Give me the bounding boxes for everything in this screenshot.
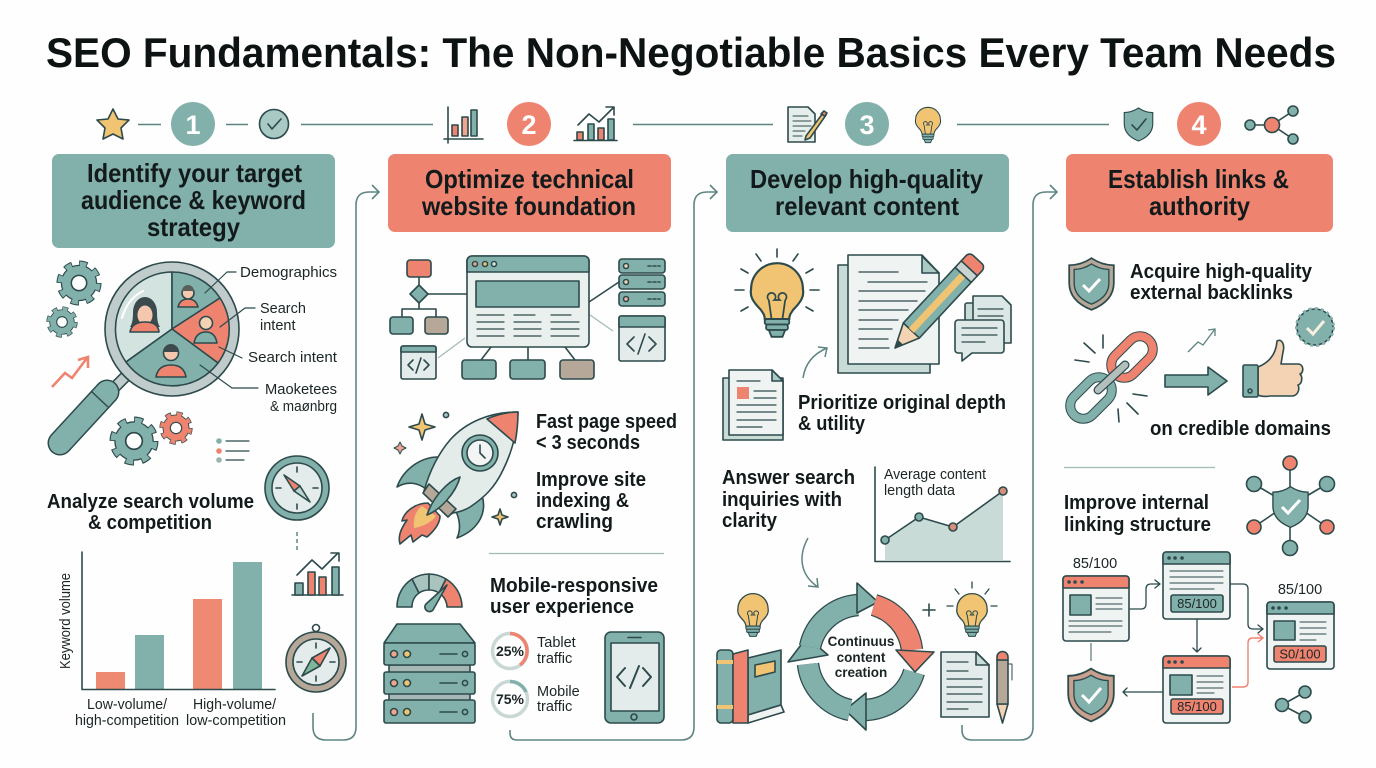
code window large bbox=[619, 316, 665, 361]
diagram: site architecture bbox=[390, 256, 665, 379]
icon: chain link bbox=[1065, 331, 1158, 424]
donut: tablet traffic 25%: traffic bbox=[537, 651, 572, 667]
person: man bottom bbox=[156, 344, 186, 377]
icon: server rack bbox=[384, 624, 475, 723]
icon: bar chart bbox=[444, 107, 483, 143]
plus sign bbox=[923, 604, 935, 616]
text: answer search inquiries bbox=[722, 467, 855, 532]
line chart: average content length bbox=[875, 467, 1010, 562]
icon: chat documents bbox=[955, 296, 1011, 361]
text: acquire backlinks bbox=[1130, 261, 1313, 304]
text: fast page speed: Fast page speed bbox=[536, 411, 677, 433]
icon: right arrow bbox=[1165, 367, 1227, 395]
line chart: average content length: Average content bbox=[884, 467, 986, 483]
connector arrow: step 2 to 3 bbox=[510, 185, 717, 740]
heading: step 1 bbox=[52, 154, 335, 248]
text: acquire backlinks: Acquire high-quality bbox=[1130, 261, 1313, 283]
icon: tablet with code bbox=[605, 632, 664, 723]
heading: step 3: Develop high-quality bbox=[750, 164, 983, 194]
diagram: internal link pages bbox=[1063, 552, 1334, 723]
bar chart: keyword volume: Keyword volume bbox=[58, 573, 74, 669]
label: search intent two-line: Search bbox=[260, 301, 306, 317]
icon: verified badge bbox=[1296, 308, 1334, 346]
heading: step 4: authority bbox=[1149, 191, 1250, 221]
page card D bbox=[1267, 582, 1334, 669]
cycle diagram: continuous content creation: Continuus bbox=[828, 634, 894, 649]
icon: small document stack bbox=[723, 370, 783, 440]
label: demographics bbox=[205, 265, 337, 293]
step number 3 bbox=[845, 102, 889, 146]
icon: small trend bbox=[1188, 329, 1215, 352]
icon: shield network bbox=[1246, 456, 1334, 556]
text: answer search inquiries: inquiries with bbox=[722, 489, 842, 511]
donut: mobile traffic 75%: Mobile bbox=[537, 684, 580, 700]
icon: books bbox=[717, 650, 784, 723]
icon: bulb left bbox=[738, 594, 768, 636]
panel: step 1 audience and keywords bbox=[47, 154, 346, 729]
text: fast page speed bbox=[536, 411, 677, 454]
text: mobile responsive bbox=[490, 575, 658, 618]
text: fast page speed: < 3 seconds bbox=[536, 432, 640, 454]
icon: compass bbox=[265, 456, 329, 520]
icon: light bulb bbox=[915, 107, 941, 143]
icon: big light bulb with rays bbox=[735, 249, 819, 337]
label: search intent bbox=[219, 347, 337, 366]
title: SEO Fundamentals: The Non-Negotiable Basics Every Team Needs bbox=[46, 29, 1336, 76]
page card C bbox=[1163, 656, 1230, 723]
bar chart: keyword volume: high-competition bbox=[75, 713, 179, 729]
heading: step 1: audience & keyword bbox=[81, 185, 306, 215]
icon: shield lower bbox=[1068, 669, 1114, 721]
heading: step 1: strategy bbox=[147, 212, 240, 242]
icon: share nodes bbox=[1276, 686, 1311, 723]
text: improve site indexing: Improve site bbox=[536, 469, 646, 491]
browser window bbox=[467, 256, 589, 347]
text: answer search inquiries: Answer search bbox=[722, 467, 855, 489]
text: prioritize original depth: & utility bbox=[798, 413, 866, 435]
text: mobile responsive: user experience bbox=[490, 596, 634, 618]
page card A bbox=[1063, 556, 1129, 641]
page card A: 85/100 bbox=[1073, 556, 1117, 572]
donut: mobile traffic 75% bbox=[492, 682, 580, 716]
panel: step 3 quality content bbox=[717, 154, 1012, 730]
donut: tablet traffic 25%: Tablet bbox=[537, 635, 576, 651]
icon: document and pencil bbox=[788, 107, 827, 142]
icon: thumbs up bbox=[1243, 340, 1303, 397]
icon: pencil right bbox=[997, 652, 1012, 723]
text: analyze search volume: Analyze search volume bbox=[47, 491, 254, 513]
donut: mobile traffic 75%: traffic bbox=[537, 699, 572, 715]
step number 4 bbox=[1177, 102, 1221, 146]
text: answer search inquiries: clarity bbox=[722, 510, 778, 532]
heading: step 2 bbox=[388, 154, 671, 232]
icon: star bbox=[97, 109, 129, 139]
text: improve site indexing bbox=[536, 469, 646, 533]
line chart: average content length: length data bbox=[884, 483, 956, 499]
page card D: 85/100 bbox=[1278, 582, 1322, 598]
step number 2 bbox=[507, 102, 551, 146]
donut: mobile traffic 75%: 75% bbox=[496, 691, 525, 707]
bar chart: keyword volume: low-competition bbox=[186, 713, 286, 729]
heading: step 4 bbox=[1066, 154, 1333, 232]
connector arrow: step 1 to 2 bbox=[313, 185, 379, 740]
cycle diagram: continuous content creation: creation bbox=[835, 665, 887, 680]
icon: document with pencil bbox=[838, 252, 986, 373]
icon: check circle bbox=[260, 110, 288, 138]
text: improve internal linking: Improve internal bbox=[1064, 492, 1209, 514]
icon: shield badge bbox=[1069, 258, 1114, 310]
text: on credible domains: on credible domains bbox=[1150, 418, 1331, 440]
label: marketers bbox=[200, 365, 337, 415]
donut: tablet traffic 25%: 25% bbox=[496, 643, 525, 659]
text: mobile responsive: Mobile-responsive bbox=[490, 575, 658, 597]
heading: step 2: Optimize technical bbox=[425, 164, 634, 194]
icon: shield check bbox=[1124, 108, 1153, 141]
heading: step 3: relevant content bbox=[775, 191, 959, 221]
page card D: S0/100 bbox=[1279, 646, 1321, 662]
icon: pocket compass bbox=[286, 624, 346, 692]
text: improve site indexing: crawling bbox=[536, 511, 613, 533]
label: search intent two-line bbox=[220, 301, 306, 334]
text: acquire backlinks: external backlinks bbox=[1130, 282, 1293, 304]
text: analyze search volume bbox=[47, 491, 254, 534]
icon: trend chart bbox=[574, 107, 617, 140]
pencil bbox=[887, 252, 986, 356]
text: prioritize original depth: Prioritize original depth bbox=[798, 392, 1006, 414]
heading: step 3 bbox=[726, 154, 1009, 232]
icon: gears bottom bbox=[114, 415, 189, 461]
label: marketers: Maoketees bbox=[265, 382, 337, 398]
page card C: 85/100 bbox=[1177, 699, 1217, 714]
heading: step 1: Identify your target bbox=[87, 158, 302, 188]
person: man coral slice bbox=[194, 316, 217, 343]
icon: trend arrow bbox=[52, 357, 88, 387]
page card B bbox=[1163, 552, 1230, 619]
bar chart: keyword volume: Low-volume/ bbox=[87, 697, 168, 713]
cycle diagram: continuous content creation bbox=[788, 583, 934, 730]
person: man upper bbox=[178, 285, 198, 307]
text: improve internal linking bbox=[1064, 492, 1211, 536]
icon: speed gauge bbox=[397, 574, 462, 612]
bar chart: keyword volume: High-volume/ bbox=[193, 697, 277, 713]
step number 2: 2 bbox=[521, 110, 537, 140]
person: woman bbox=[130, 297, 160, 332]
step number 1 bbox=[171, 102, 215, 146]
text: prioritize original depth bbox=[798, 392, 1006, 435]
icon: mini bar trend bbox=[292, 553, 343, 595]
connector arrow: step 3 to 4 bbox=[962, 185, 1057, 740]
icon: curved arrow to document bbox=[803, 347, 827, 378]
text: improve internal linking: linking structure bbox=[1064, 514, 1211, 536]
icon: share network bbox=[1245, 106, 1298, 144]
icon: gears left bbox=[49, 265, 97, 335]
dashed link bbox=[296, 532, 298, 552]
panel: step 2 technical foundation bbox=[384, 154, 677, 723]
step indicator row bbox=[97, 102, 1298, 146]
icon: magnifying glass with audience pie bbox=[60, 262, 239, 443]
text: analyze search volume: & competition bbox=[88, 512, 212, 534]
bar chart: keyword volume bbox=[58, 552, 286, 729]
cycle diagram: continuous content creation: content bbox=[837, 650, 886, 665]
label: search intent two-line: intent bbox=[260, 318, 295, 334]
step number 1: 1 bbox=[185, 110, 201, 140]
label: search intent: Search intent bbox=[248, 350, 337, 366]
icon: document right bbox=[941, 652, 989, 717]
heading: step 4: Establish links & bbox=[1108, 164, 1289, 194]
code window small bbox=[401, 346, 436, 379]
page card B: 85/100 bbox=[1177, 596, 1217, 611]
heading: step 2: website foundation bbox=[421, 191, 636, 221]
step number 4: 4 bbox=[1191, 110, 1207, 140]
label: marketers: & maønbrg bbox=[270, 399, 337, 415]
icon: list legend bbox=[216, 438, 249, 463]
panel: step 4 links and authority bbox=[1063, 154, 1334, 723]
icon: curved arrow to cycle bbox=[802, 538, 818, 587]
step number 3: 3 bbox=[859, 110, 875, 140]
illustration: rocket bbox=[394, 412, 518, 544]
server stack small bbox=[619, 259, 665, 306]
text: improve site indexing: indexing & bbox=[536, 490, 629, 512]
donut: tablet traffic 25% bbox=[492, 634, 576, 668]
icon: bulb right with rays bbox=[947, 582, 997, 636]
label: demographics: Demographics bbox=[240, 265, 337, 281]
